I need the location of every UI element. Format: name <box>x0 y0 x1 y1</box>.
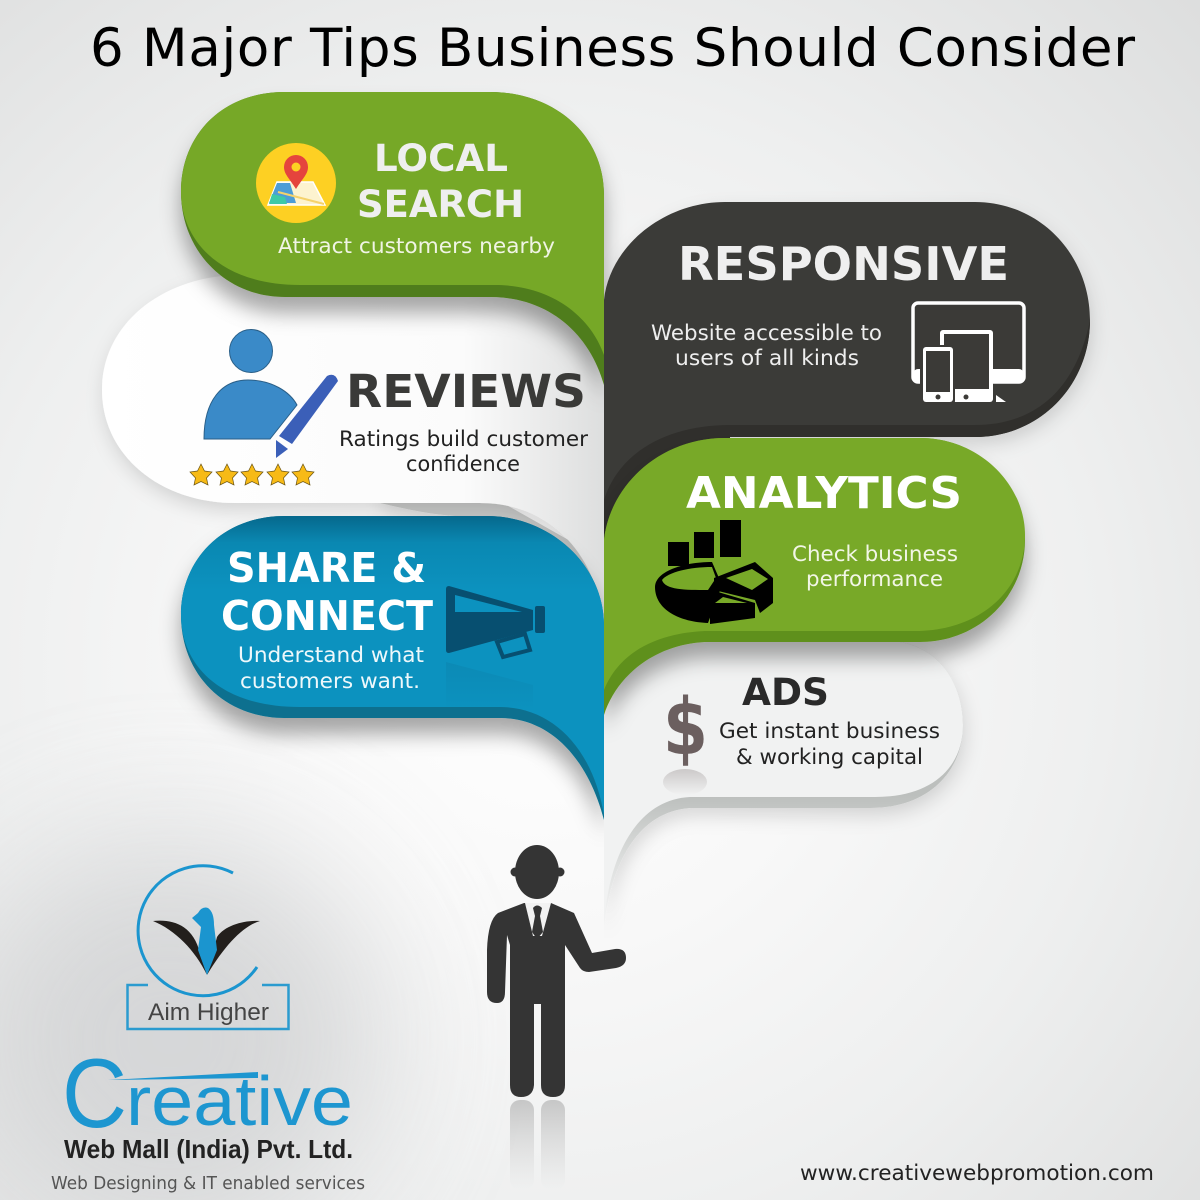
panel: analytics <box>604 438 1025 715</box>
share bubble fold <box>181 516 604 820</box>
local search heading: SEARCH <box>357 183 524 226</box>
panel: responsive <box>604 202 1090 540</box>
icon: person writing review <box>204 330 338 458</box>
man reflection <box>510 1100 565 1190</box>
panel: share and connect <box>181 516 604 820</box>
responsive fold <box>604 320 1090 540</box>
logo: creative wordmark: reative <box>126 1062 353 1140</box>
analytics description: performance <box>806 567 943 592</box>
local search bubble body <box>181 92 604 355</box>
ads bubble body <box>604 642 963 894</box>
share bubble body <box>181 516 604 815</box>
logo: creative wordmark: C <box>62 1038 127 1148</box>
analytics heading: ANALYTICS <box>686 468 962 519</box>
icon: dollar sign <box>663 694 707 790</box>
reviews bubble body <box>102 275 604 625</box>
icon: five stars <box>190 464 314 485</box>
responsive heading: RESPONSIVE <box>678 237 1009 291</box>
analytics bubble body <box>604 438 1025 690</box>
reviews bubble fold <box>380 503 593 579</box>
share description: customers want. <box>240 669 420 694</box>
responsive description: Website accessible to <box>651 321 882 346</box>
circular C mark <box>138 866 257 996</box>
icon: megaphone <box>446 586 545 670</box>
icon: dollar sign: $ <box>663 683 708 773</box>
panel: local search <box>181 92 604 385</box>
company name: Web Mall (India) Pvt. Ltd. <box>64 1134 353 1164</box>
share heading: CONNECT <box>221 592 433 640</box>
tagline frame <box>128 985 288 1029</box>
icon: responsive devices <box>913 303 1024 405</box>
reviews description: Ratings build customer <box>339 427 588 452</box>
bird body <box>192 908 217 975</box>
panel: reviews <box>102 275 604 640</box>
ads description: & working capital <box>736 745 923 770</box>
logo: aim higher emblem <box>128 866 288 1029</box>
logo: creative wordmark <box>62 1038 353 1148</box>
analytics description: Check business <box>792 542 958 567</box>
tagline: Aim Higher <box>148 999 269 1026</box>
shirt collar <box>525 903 551 936</box>
necktie <box>532 906 543 939</box>
panel: ads <box>604 642 963 930</box>
local search description: Attract customers nearby <box>278 234 555 259</box>
title: 6 Major Tips Business Should Consider <box>90 18 1135 79</box>
ads bubble fold <box>604 642 963 930</box>
ads heading: ADS <box>742 671 829 714</box>
responsive description: users of all kinds <box>675 346 859 371</box>
ads description: Get instant business <box>719 719 940 744</box>
reviews description: confidence <box>406 452 520 477</box>
bird wings <box>153 921 260 975</box>
responsive bubble <box>604 202 1098 500</box>
analytics bubble fold <box>604 438 1025 715</box>
share heading: SHARE & <box>227 544 426 592</box>
share description: Understand what <box>238 643 424 668</box>
icon: bars and pie chart <box>655 520 773 624</box>
website url: www.creativewebpromotion.com <box>800 1161 1154 1186</box>
man silhouette <box>487 845 626 1097</box>
icon: map pin in yellow circle <box>256 143 336 223</box>
local search heading: LOCAL <box>374 137 508 180</box>
local search bubble fold <box>181 92 604 385</box>
company tagline: Web Designing & IT enabled services <box>51 1173 365 1194</box>
reviews heading: REVIEWS <box>346 365 586 418</box>
